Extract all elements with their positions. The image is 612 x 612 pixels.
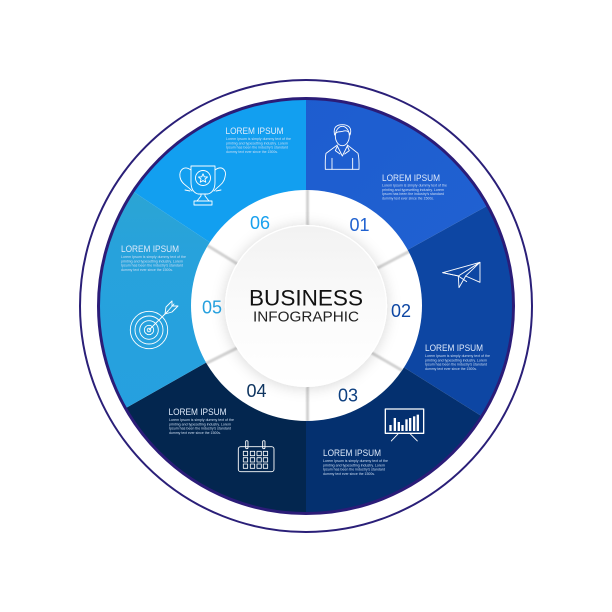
text block 04: LOREM IPSUM — [168, 407, 226, 417]
pie of six coloured segments — [100, 100, 512, 512]
ring spokes — [205, 188, 410, 425]
text block 04: printing and typesetting industry. Lorem — [169, 422, 231, 426]
subtitle: INFOGRAPHIC — [253, 309, 359, 326]
text block 01: LOREM IPSUM — [382, 173, 440, 183]
outer thin ring — [80, 80, 532, 532]
text block 01: Ipsum has been the industry's standard — [382, 192, 444, 196]
text block 05 — [121, 244, 186, 272]
title: BUSINESS — [249, 286, 363, 311]
icon: target with arrow — [130, 301, 178, 349]
segment 02 — [404, 206, 512, 416]
number 02: 02 — [391, 301, 411, 321]
text block 01 — [382, 173, 447, 200]
text block 01: dummy text ever since the 1500s. — [382, 196, 434, 200]
segment 06 — [134, 100, 306, 242]
title — [249, 286, 363, 326]
icon: paper plane — [443, 262, 480, 288]
centre disc — [226, 226, 386, 386]
text block 03: LOREM IPSUM — [323, 448, 381, 458]
text block 01: Lorem Ipsum is simply dummy text of the — [382, 184, 447, 188]
segment 04 — [126, 362, 306, 512]
text block 05: dummy text ever since the 1500s. — [121, 268, 173, 272]
text block 05: Ipsum has been the industry's standard — [121, 264, 183, 268]
icon: presentation chart — [385, 409, 424, 441]
segment 05 — [100, 192, 210, 408]
text block 02: printing and typesetting industry. Lorem — [425, 358, 487, 362]
text block 03: Ipsum has been the industry's standard — [323, 468, 385, 472]
text block 04: Ipsum has been the industry's standard — [169, 427, 231, 431]
text block 06: Ipsum has been the industry's standard — [226, 146, 288, 150]
text block 02 — [425, 343, 490, 371]
text block 02: LOREM IPSUM — [425, 343, 483, 353]
number 04: 04 — [246, 381, 267, 401]
text block 01: printing and typesetting industry. Lorem — [382, 188, 444, 192]
text block 04: dummy text ever since the 1500s. — [169, 431, 221, 435]
text block 05: printing and typesetting industry. Lorem — [121, 259, 183, 263]
text block 06: dummy text ever since the 1500s. — [226, 150, 278, 154]
text block 05: LOREM IPSUM — [121, 244, 179, 254]
text block 06: LOREM IPSUM — [226, 126, 284, 136]
segment 03 — [306, 368, 480, 512]
white number ring — [191, 190, 422, 421]
text block 04: Lorem Ipsum is simply dummy text of the — [169, 418, 234, 422]
text block 06 — [226, 126, 291, 154]
text block 04 — [168, 407, 234, 435]
text block 06: Lorem Ipsum is simply dummy text of the — [226, 137, 291, 141]
icon: calendar — [238, 441, 274, 472]
icon: trophy — [180, 166, 225, 205]
number 06: 06 — [250, 213, 270, 233]
text block 02: dummy text ever since the 1500s. — [425, 367, 477, 371]
dark pie border — [98, 98, 514, 514]
text block 03 — [323, 448, 388, 476]
icon: person — [325, 125, 359, 169]
text block 02: Lorem Ipsum is simply dummy text of the — [425, 354, 490, 358]
text block 03: dummy text ever since the 1500s. — [323, 472, 375, 476]
number 05: 05 — [202, 298, 222, 318]
text block 05: Lorem Ipsum is simply dummy text of the — [121, 255, 186, 259]
number 03: 03 — [338, 386, 358, 406]
segment 01 — [306, 100, 486, 250]
text block 03: printing and typesetting industry. Lorem — [323, 463, 385, 467]
text block 02: Ipsum has been the industry's standard — [425, 363, 487, 367]
text block 06: printing and typesetting industry. Lorem — [226, 141, 288, 145]
text block 03: Lorem Ipsum is simply dummy text of the — [323, 459, 388, 463]
number 01: 01 — [350, 215, 370, 235]
